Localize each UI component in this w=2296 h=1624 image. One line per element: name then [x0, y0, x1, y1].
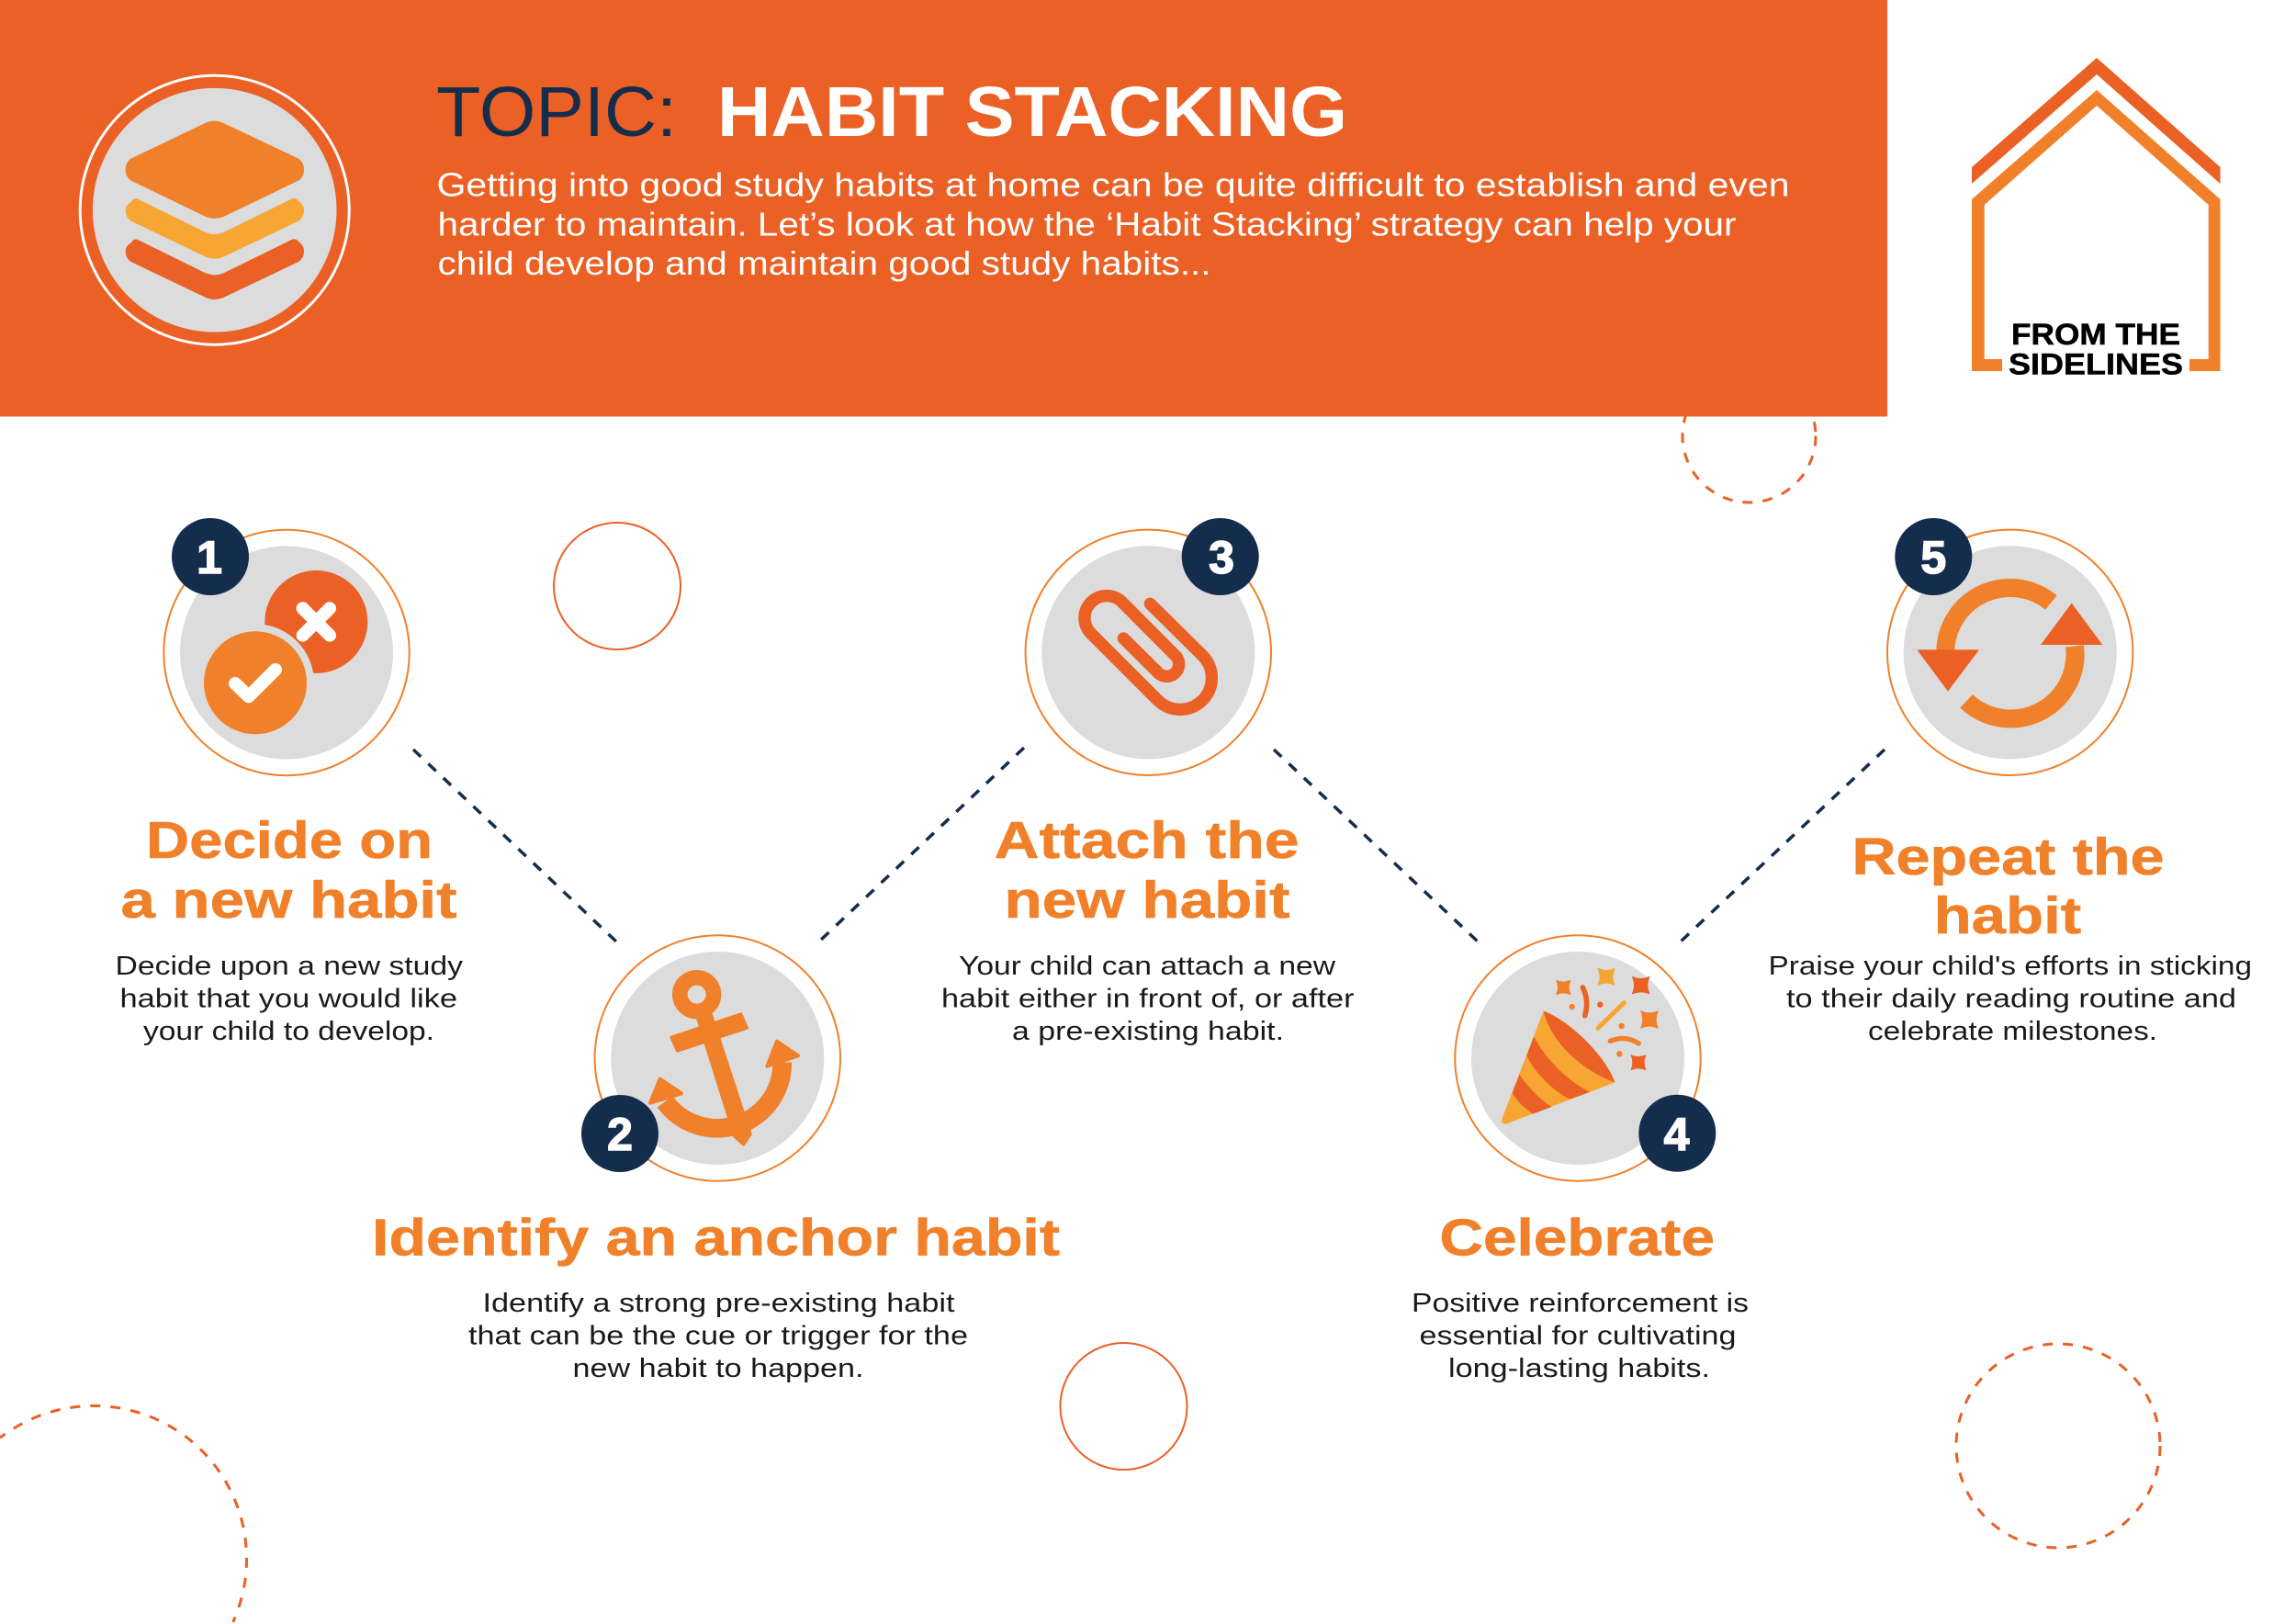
icon: party popper [1455, 935, 1701, 1181]
badge 3: 3 [1209, 532, 1234, 583]
description: new habit to happen. [573, 1354, 863, 1383]
badge 2: 2 [607, 1109, 633, 1160]
intro text: Getting into good study habits at home can be quite difficult to establish and even [437, 165, 1789, 204]
icon: repeat arrows [1887, 530, 2133, 775]
heading: habit [1934, 886, 2081, 945]
description: Identify a strong pre-existing habit [483, 1289, 955, 1318]
badge 5: 5 [1920, 532, 1946, 583]
intro text: child develop and maintain good study habits... [437, 244, 1210, 282]
badge 2 [581, 1095, 658, 1172]
description: Praise your child's efforts in sticking [1769, 952, 2252, 981]
decorative circles [0, 369, 2160, 1622]
description: Your child can attach a new [959, 952, 1336, 981]
heading: Repeat the [1851, 828, 2164, 886]
description [116, 952, 464, 1046]
badge 3 [1182, 518, 1259, 595]
intro text: harder to maintain. Let’s look at how the ‘Habit Stacking’ strategy can help your [437, 206, 1737, 242]
title: HABIT STACKING [717, 73, 1347, 152]
heading: new habit [1005, 871, 1290, 930]
description [1769, 952, 2252, 1046]
heading: Attach the [994, 811, 1299, 870]
description [941, 952, 1355, 1046]
intro text [437, 165, 1789, 282]
description: to their daily reading routine and [1786, 985, 2236, 1014]
description: Positive reinforcement is [1412, 1289, 1749, 1318]
panel: step 5 repeat the habit [1769, 518, 2252, 1046]
description: that can be the cue or trigger for the [468, 1322, 968, 1351]
badge 4 [1638, 1095, 1716, 1172]
description [468, 1289, 968, 1383]
heading: Celebrate [1440, 1209, 1715, 1268]
badge 1 [172, 518, 249, 595]
icon: cross and check [163, 530, 410, 775]
header banner [0, 0, 1887, 417]
description: habit that you would like [119, 985, 457, 1014]
badge 5 [1895, 518, 1972, 595]
description [1412, 1289, 1749, 1383]
title: TOPIC: [436, 73, 677, 152]
logo: From the Sidelines: SIDELINES [2009, 347, 2183, 380]
description: habit either in front of, or after [941, 985, 1355, 1014]
heading: Identify an anchor habit [372, 1209, 1060, 1268]
logo: From the Sidelines: FROM THE [2011, 318, 2180, 351]
description: celebrate milestones. [1868, 1017, 2157, 1046]
icon: paperclip [1026, 530, 1271, 775]
title [436, 73, 1347, 152]
panel: step 3 attach the new habit [941, 518, 1355, 1046]
badge 4: 4 [1664, 1109, 1690, 1160]
heading [1851, 828, 2164, 945]
description: a pre-existing habit. [1012, 1017, 1284, 1046]
panel: step 2 identify an anchor habit [372, 935, 1060, 1383]
heading: Decide on [146, 811, 433, 870]
description: long-lasting habits. [1448, 1354, 1710, 1383]
logo: From the Sidelines [1972, 58, 2221, 380]
heading [121, 811, 457, 930]
description: essential for cultivating [1420, 1322, 1736, 1351]
description: Decide upon a new study [116, 952, 464, 981]
description: your child to develop. [143, 1017, 434, 1046]
panel: step 4 celebrate [1412, 935, 1749, 1383]
heading [994, 811, 1299, 930]
icon: anchor [595, 935, 840, 1181]
heading: a new habit [121, 871, 457, 930]
icon: stacked layers [80, 75, 349, 344]
panel: step 1 decide on a new habit [116, 518, 464, 1046]
badge 1: 1 [197, 532, 222, 583]
connector lines [413, 748, 1885, 942]
